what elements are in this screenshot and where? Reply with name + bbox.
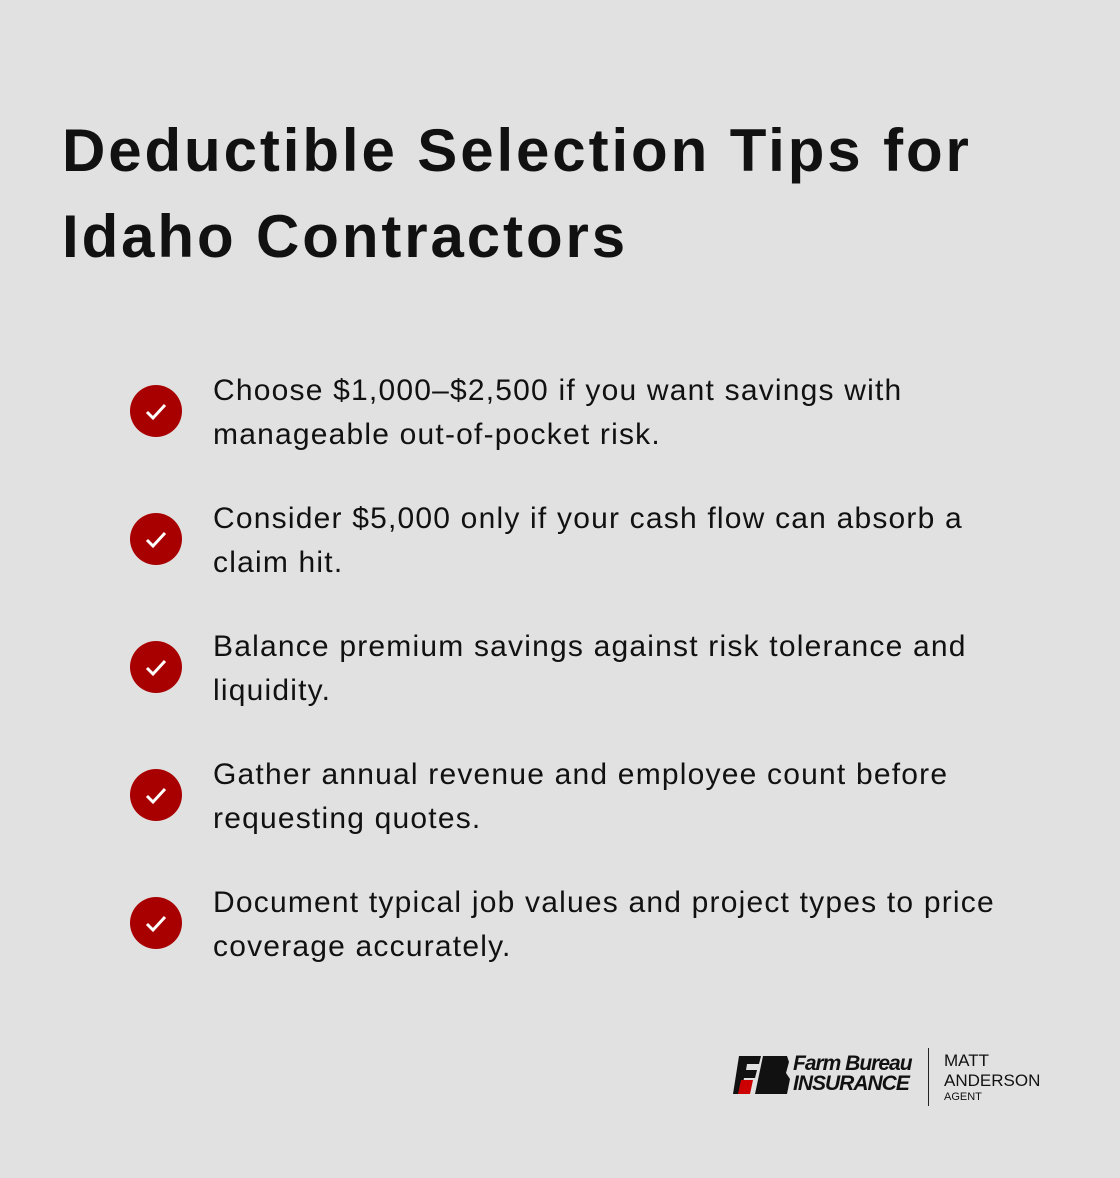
item 3 (130, 630, 967, 707)
logo (733, 1048, 1040, 1106)
text 3: liquidity. (213, 674, 331, 707)
text 1 (213, 374, 902, 451)
item 4 (130, 758, 948, 835)
text 2: claim hit. (213, 546, 343, 579)
title: Idaho Contractors (62, 203, 628, 270)
agent name: AGENT (944, 1091, 982, 1103)
text 3: Balance premium savings against risk tolerance and (213, 630, 967, 663)
text 4: Gather annual revenue and employee count before (213, 758, 948, 791)
text 5: coverage accurately. (213, 930, 512, 963)
text 2 (213, 502, 963, 579)
agent name: ANDERSON (944, 1071, 1040, 1090)
icon: check (130, 641, 182, 693)
icon: check (130, 769, 182, 821)
icon: FB mark (733, 1056, 790, 1094)
item 1 (130, 374, 902, 451)
text 4: requesting quotes. (213, 802, 481, 835)
text 1: manageable out-of-pocket risk. (213, 418, 661, 451)
title: Deductible Selection Tips for (62, 117, 972, 184)
text 5 (213, 886, 995, 963)
item 2 (130, 502, 963, 579)
text 2: Consider $5,000 only if your cash flow can absorb a (213, 502, 963, 535)
text 1: Choose $1,000–$2,500 if you want savings with (213, 374, 902, 407)
text 4 (213, 758, 948, 835)
agent name (944, 1051, 1040, 1103)
icon: check (130, 385, 182, 437)
icon: check (130, 513, 182, 565)
logo text: INSURANCE (793, 1072, 909, 1095)
icon: check (130, 897, 182, 949)
text 3 (213, 630, 967, 707)
text 5: Document typical job values and project types to price (213, 886, 995, 919)
item 5 (130, 886, 995, 963)
logo text: Farm Bureau (793, 1052, 912, 1075)
logo text (793, 1052, 912, 1095)
title (62, 117, 972, 270)
agent name: MATT (944, 1051, 989, 1070)
